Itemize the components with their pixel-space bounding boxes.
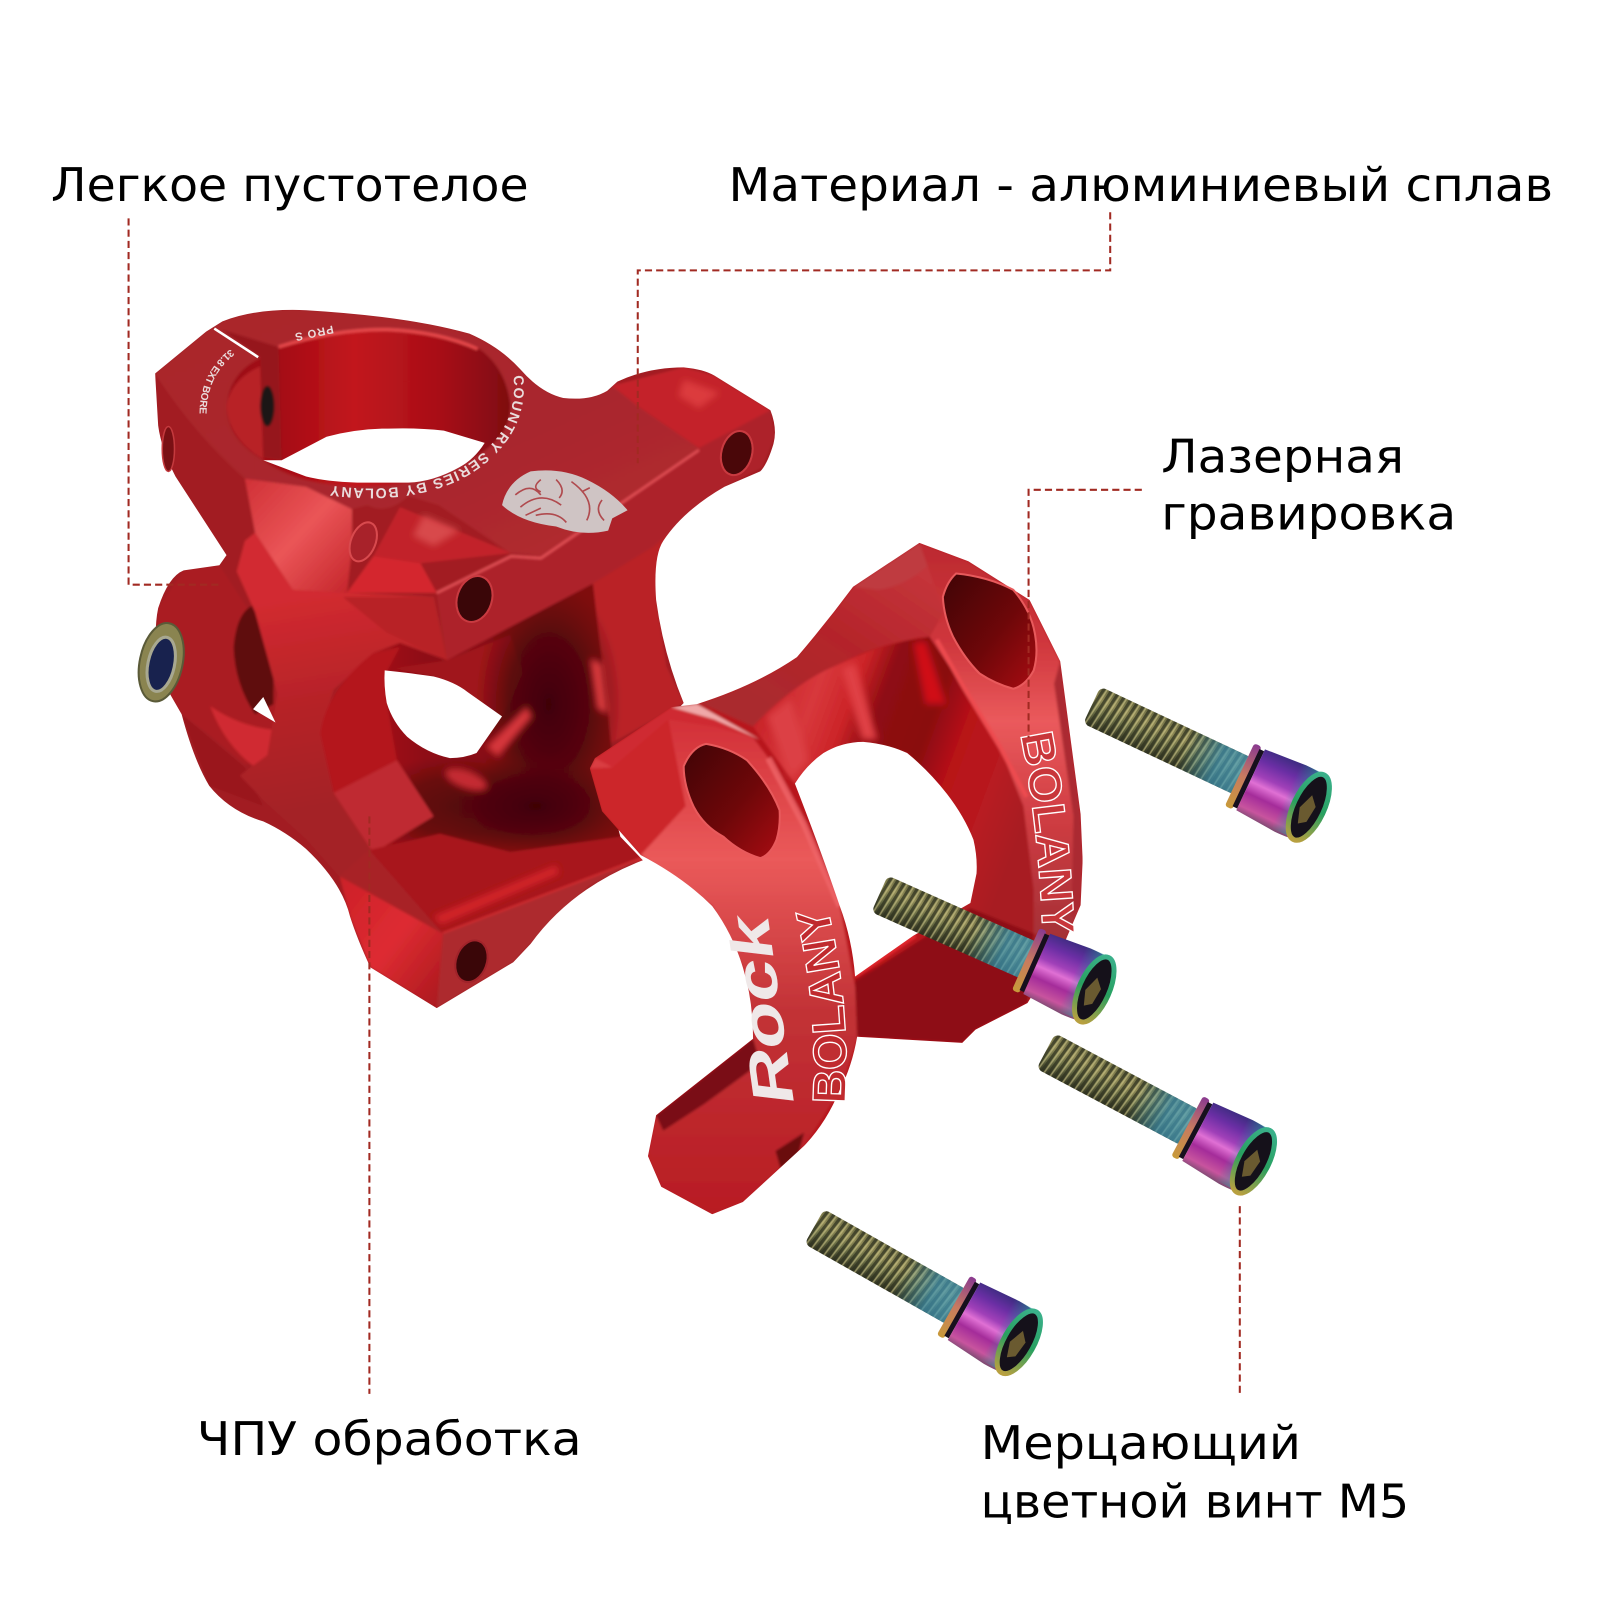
stem: block with chamfer (343, 597, 447, 660)
label: laser engraving: Лазерная (1161, 429, 1404, 483)
stem: upper front face (437, 410, 774, 660)
label: colored M5 screw: цветной винт М5 (981, 1474, 1409, 1528)
label: material: Материал - алюминиевый сплав (729, 158, 1553, 212)
stem: ring inner wall (227, 330, 510, 487)
threaded hole: upper right (716, 427, 757, 479)
bolt 4 (797, 1195, 1050, 1381)
stem: central socket (385, 584, 620, 852)
engraved dragon emblem (502, 470, 628, 533)
bolt 3 (1029, 1019, 1284, 1200)
label: CNC machining: ЧПУ обработка (197, 1412, 582, 1466)
stem: top surface of clamp plate (155, 310, 699, 555)
side hole on ring (162, 427, 174, 471)
engraved text: bore size: 31.8 EXT BORE (200, 350, 234, 414)
stem: lower threaded face (437, 858, 643, 1008)
stem: lower bevel (340, 850, 443, 934)
clamp logo: right BOLANY: BOLANY (1020, 731, 1074, 932)
label: laser engraving (1161, 429, 1456, 541)
clamp hole: right (943, 573, 1037, 689)
white see-through of left tube (253, 697, 276, 722)
clamp: top band (702, 566, 944, 726)
clamp: right shoulder and strip face (919, 543, 1083, 941)
stem: upper right block (612, 367, 770, 448)
clamp logo: left BOLANY: BOLANY (795, 912, 848, 1102)
stem: right pillar (593, 520, 684, 753)
label: colored M5 screw (981, 1416, 1409, 1528)
left mini bolt (132, 619, 190, 706)
threaded hole: upper front (451, 571, 498, 627)
bolt 2 (865, 861, 1123, 1028)
threaded hole: lower (450, 936, 493, 987)
leader: lightweight hollow (129, 218, 220, 585)
white see-through of socket (384, 670, 502, 758)
engraved text on ring: COUNTRY SERIES BY BOLANY (330, 376, 524, 498)
bolt 1 (1076, 672, 1338, 847)
threaded hole: notch (344, 518, 382, 565)
stem: left clamp tube (185, 608, 272, 760)
clamp: inner curved wall (754, 636, 1036, 1003)
leader: colored bolt (1239, 1206, 1241, 1394)
stem: slit wall (221, 330, 282, 460)
product: bicycle stem body (138, 310, 775, 1008)
leader: material (638, 212, 1110, 463)
clamp: left strip face (590, 707, 857, 1214)
stem: ring left crescent (227, 366, 263, 459)
leader: laser engraving (1029, 490, 1142, 738)
product: faceplate clamp (590, 543, 1083, 1214)
stem: sloped highlight facet (245, 479, 352, 593)
leader: CNC machining (368, 816, 370, 1394)
stem: central mass (236, 532, 442, 791)
label: laser engraving: гравировка (1161, 487, 1456, 541)
label: colored M5 screw: Мерцающий (981, 1416, 1301, 1470)
stem: lower floor (371, 832, 620, 931)
clamp logo: Rock script: Rock (716, 908, 807, 1109)
engraved text: pro: PRO S (293, 323, 335, 343)
clamp hole: left (684, 744, 780, 858)
label: lightweight hollow: Легкое пустотелое (51, 158, 529, 212)
clamp: lower arm (855, 908, 1034, 1043)
clamp slit gap (214, 329, 258, 357)
white see-through of ring (263, 428, 485, 483)
